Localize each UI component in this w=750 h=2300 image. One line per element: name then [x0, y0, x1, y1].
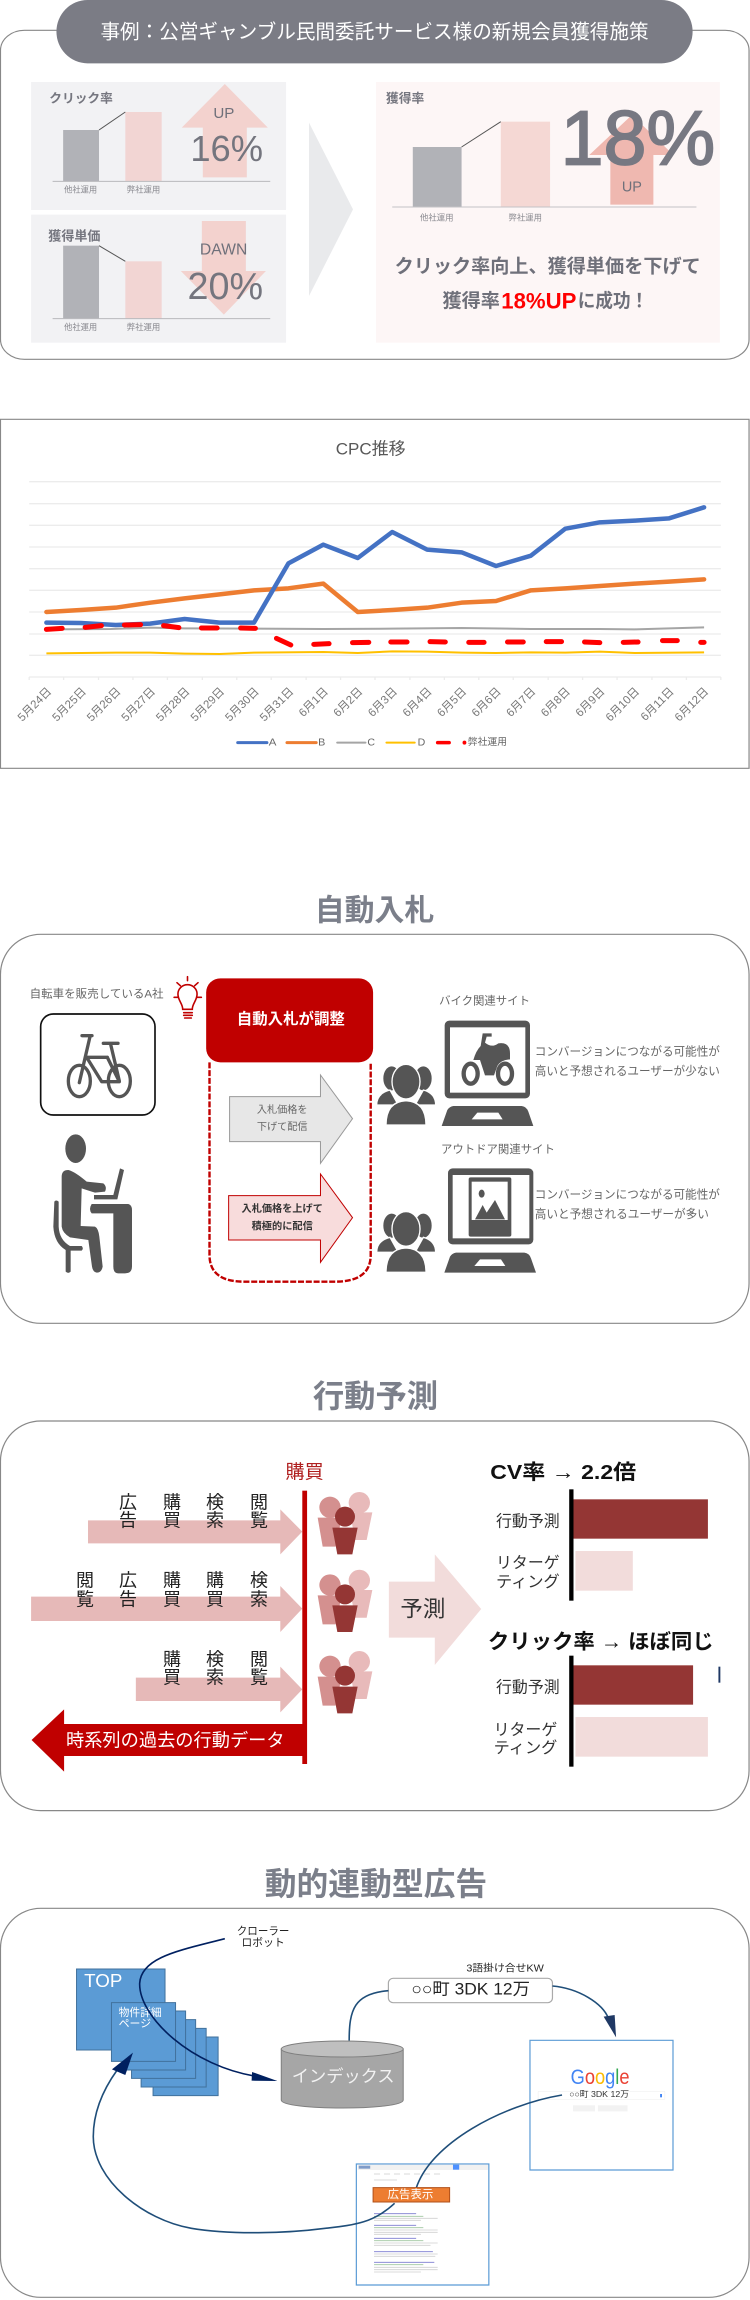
callout: ad display: 広告表示	[387, 2188, 433, 2200]
chart x axis labels: 5月31日	[258, 686, 296, 724]
text: purchase: 購買	[286, 1461, 324, 1482]
text: bike sites: バイク関連サイト	[439, 994, 530, 1007]
text: behavior labels row 1: 覧	[250, 1511, 268, 1531]
text: behavior labels row 1: 買	[163, 1511, 181, 1531]
panel: acquisition rate result: 獲得率	[442, 290, 500, 311]
callout: keyword box	[388, 1978, 552, 2003]
arrow: past behavior data: 時系列の過去の行動データ	[66, 1729, 285, 1751]
chart x axis labels: 5月27日	[120, 686, 158, 724]
panel: acquisition rate result: 弊社運用	[508, 212, 542, 223]
panel: acquisition cost: 弊社運用	[127, 322, 160, 332]
chart x axis labels: 6月11日	[639, 686, 677, 723]
text: behavior labels row 2: 告	[119, 1589, 137, 1609]
icon: customers row 1	[318, 1492, 372, 1554]
chart: click rate: ティング	[494, 1739, 557, 1757]
arrow: lower bid: 入札価格を	[257, 1104, 308, 1116]
chart x axis labels: 6月8日	[539, 686, 573, 720]
chart x axis labels: 6月9日	[574, 686, 608, 720]
search results page	[356, 2164, 489, 2285]
chart x axis labels: 6月6日	[470, 686, 504, 720]
icon: site pages stack	[77, 1969, 218, 2096]
chart legend: D	[418, 737, 425, 748]
line chart: series A	[46, 507, 704, 625]
arrow: behavior row 2	[31, 1586, 302, 1632]
text: three-word keyword: 3語掛け合せKW	[466, 1962, 544, 1974]
section: dynamic search ads	[0, 1868, 749, 2297]
chart title: CPC推移	[336, 440, 406, 459]
panel: click rate	[31, 82, 286, 210]
text: outdoor sites description	[535, 1188, 720, 1221]
chart legend: C	[367, 737, 375, 748]
arrow: google to ad	[416, 2095, 562, 2188]
chart x axis labels: 6月10日	[604, 686, 642, 724]
chart x axis labels: 5月25日	[51, 686, 89, 724]
panel: click rate: 弊社運用	[127, 185, 160, 195]
text: behavior labels row 2: 購	[206, 1571, 224, 1591]
chart x axis labels: 5月29日	[189, 686, 227, 724]
arrow: behavior row 1	[88, 1509, 302, 1554]
panel: click rate: クリック率	[49, 91, 113, 106]
line chart: series D	[46, 651, 704, 654]
panel: chart frame	[0, 419, 749, 768]
google search page: ○○町 3DK 12万	[569, 2090, 629, 2099]
arrow: lower bid	[230, 1075, 353, 1163]
arrow: keyword to google	[552, 1986, 616, 2037]
text: bike sites description	[535, 1045, 720, 1078]
text: company A: 自転車を販売しているA社	[30, 987, 164, 1000]
callout: auto bidding adjust: 自動入札が調整	[237, 1009, 345, 1028]
arrow: past behavior data	[32, 1709, 304, 1772]
chart x axis labels: 6月5日	[435, 686, 469, 720]
callout: auto bidding adjust	[206, 978, 373, 1062]
chart x axis labels: 6月12日	[673, 686, 711, 724]
panel: acquisition cost	[31, 215, 286, 343]
google search page: Google	[571, 2065, 629, 2089]
chart x axis labels: 5月24日	[16, 686, 54, 724]
text: behavior labels row 3: 買	[163, 1667, 181, 1687]
text: behavior labels row 3: 覧	[250, 1667, 268, 1687]
text: behavior labels row 1	[119, 1493, 268, 1531]
text: behavior labels row 1: 広	[119, 1493, 137, 1513]
chart legend: B	[318, 737, 325, 748]
text: behavior labels row 3: 閲	[250, 1649, 268, 1669]
chart x axis labels	[16, 686, 711, 724]
chart: CV rate: ティング	[496, 1573, 560, 1591]
icon: light bulb	[174, 977, 201, 1018]
panel: auto bidding frame	[0, 934, 749, 1323]
arrow: prediction: 予測	[400, 1596, 445, 1621]
text: behavior labels row 2: 購	[163, 1571, 181, 1591]
chart x axis labels: 6月1日	[297, 686, 331, 720]
text: behavior labels row 3: 検	[206, 1649, 224, 1669]
icon: people group 2	[377, 1212, 436, 1272]
text: outdoor sites: アウトドア関連サイト	[441, 1143, 555, 1155]
section: auto bidding	[0, 893, 749, 1323]
chart legend	[238, 736, 507, 748]
arrow: chevron to result	[309, 123, 353, 296]
icon: site pages stack: 物件詳細	[119, 2006, 162, 2018]
chart x axis labels: 5月28日	[154, 686, 193, 724]
arrow: behavior row 3	[136, 1667, 302, 1712]
panel: acquisition rate result: UP	[622, 179, 642, 195]
text: behavior labels row 2: 索	[250, 1589, 268, 1609]
arrow: raise bid: 入札価格を上げて	[242, 1203, 323, 1215]
heading: auto bidding: 自動入札	[315, 893, 434, 927]
chart: click rate	[488, 1631, 720, 1767]
arrow: raise bid: 積極的に配信	[252, 1220, 313, 1232]
text: behavior labels row 1: 閲	[250, 1493, 268, 1513]
text: behavior labels row 2: 検	[250, 1571, 268, 1591]
section: case study	[0, 0, 749, 359]
text: behavior labels row 1: 告	[119, 1511, 137, 1531]
text: behavior labels row 1: 購	[163, 1493, 181, 1513]
text: behavior labels row 2: 買	[206, 1589, 224, 1609]
chart: CV rate: 行動予測	[496, 1513, 560, 1531]
panel: acquisition rate result: 獲得率	[386, 91, 424, 106]
icon: people group 1	[377, 1064, 436, 1125]
section: behavior prediction	[0, 1379, 749, 1811]
panel: acquisition rate result: 他社運用	[420, 212, 453, 223]
section: CPC chart	[0, 419, 749, 768]
chart: CV rate	[490, 1461, 708, 1601]
chart x axis labels: 6月2日	[332, 686, 365, 720]
panel: case study frame	[0, 30, 749, 359]
panel: acquisition cost: 他社運用	[64, 322, 97, 332]
panel: acquisition cost: 20%	[188, 265, 263, 307]
arrow: index to keyword	[349, 1991, 388, 2041]
google search page	[530, 2040, 673, 2170]
icon: index database: インデックス	[292, 2067, 395, 2086]
panel: acquisition rate result: 18%UP	[501, 288, 576, 313]
text: crawler robot: クローラー	[237, 1925, 289, 1937]
chart legend: A	[269, 737, 277, 748]
icon: bicycle in box	[41, 1014, 155, 1115]
line chart: own operation dashed series	[46, 625, 704, 645]
panel: click rate: UP	[213, 104, 234, 121]
icon: site pages stack: ページ	[119, 2017, 151, 2029]
arrow: crawler to index	[140, 1939, 277, 2081]
text: behavior labels row 2: 買	[163, 1589, 181, 1609]
panel: behavior prediction frame	[0, 1421, 749, 1811]
dashed bracket	[210, 1062, 371, 1282]
text: behavior labels row 1: 索	[206, 1511, 224, 1531]
icon: site pages stack: TOP	[84, 1970, 122, 1991]
panel: acquisition cost: 獲得単価	[48, 229, 100, 244]
icon: monitor with motorbike	[442, 1021, 533, 1126]
text: crawler robot: ロボット	[242, 1936, 285, 1948]
text: behavior labels row 3	[163, 1649, 268, 1687]
divider bar: purchase line	[302, 1491, 307, 1764]
text: behavior labels row 2	[76, 1571, 268, 1609]
icon: customers row 2	[318, 1570, 372, 1632]
panel: click rate: 16%	[190, 128, 263, 169]
chart x axis labels: 5月30日	[223, 686, 262, 724]
chart: click rate: リターゲ	[494, 1721, 557, 1739]
line chart: series C	[46, 627, 704, 629]
text: behavior labels row 2: 閲	[76, 1571, 94, 1591]
chart x axis labels: 6月4日	[401, 686, 435, 720]
panel: acquisition cost: DAWN	[200, 242, 247, 258]
heading: dynamic search ads: 動的連動型広告	[265, 1868, 487, 1902]
text: behavior labels row 3: 購	[163, 1649, 181, 1669]
arrow: lower bid: 下げて配信	[257, 1120, 308, 1132]
chart x axis labels: 5月26日	[85, 686, 123, 724]
panel: acquisition rate result: に成功！	[578, 290, 648, 311]
chart: CV rate: CV率 → 2.2倍	[490, 1461, 636, 1484]
icon: monitor with picture	[444, 1168, 536, 1273]
chart: click rate: 行動予測	[496, 1679, 560, 1697]
arrow: prediction	[389, 1554, 481, 1665]
callout: keyword box: ○○町 3DK 12万	[411, 1980, 530, 1999]
chart x axis labels: 6月7日	[505, 686, 538, 720]
title pill	[56, 0, 693, 63]
panel: dynamic ads frame	[0, 1908, 749, 2297]
text: behavior labels row 3: 索	[206, 1667, 224, 1687]
heading: behavior prediction: 行動予測	[313, 1379, 438, 1414]
text: behavior labels row 2: 覧	[76, 1589, 94, 1609]
line chart: series B	[46, 579, 704, 612]
chart legend: 弊社運用	[468, 736, 507, 748]
icon: index database	[281, 2041, 403, 2108]
text: behavior labels row 2: 広	[119, 1571, 137, 1591]
chart: CV rate: リターゲ	[496, 1554, 560, 1572]
text: behavior labels row 1: 検	[206, 1493, 224, 1513]
icon: customers row 3	[318, 1651, 372, 1713]
panel: acquisition rate result	[376, 82, 720, 343]
arrow: raise bid	[229, 1174, 353, 1262]
chart x axis labels: 6月3日	[366, 686, 400, 720]
text: crawler robot	[237, 1925, 289, 1948]
panel: click rate: 他社運用	[64, 185, 97, 195]
icon: person at laptop	[53, 1134, 132, 1273]
arrow: ad to landing page	[93, 2053, 395, 2233]
